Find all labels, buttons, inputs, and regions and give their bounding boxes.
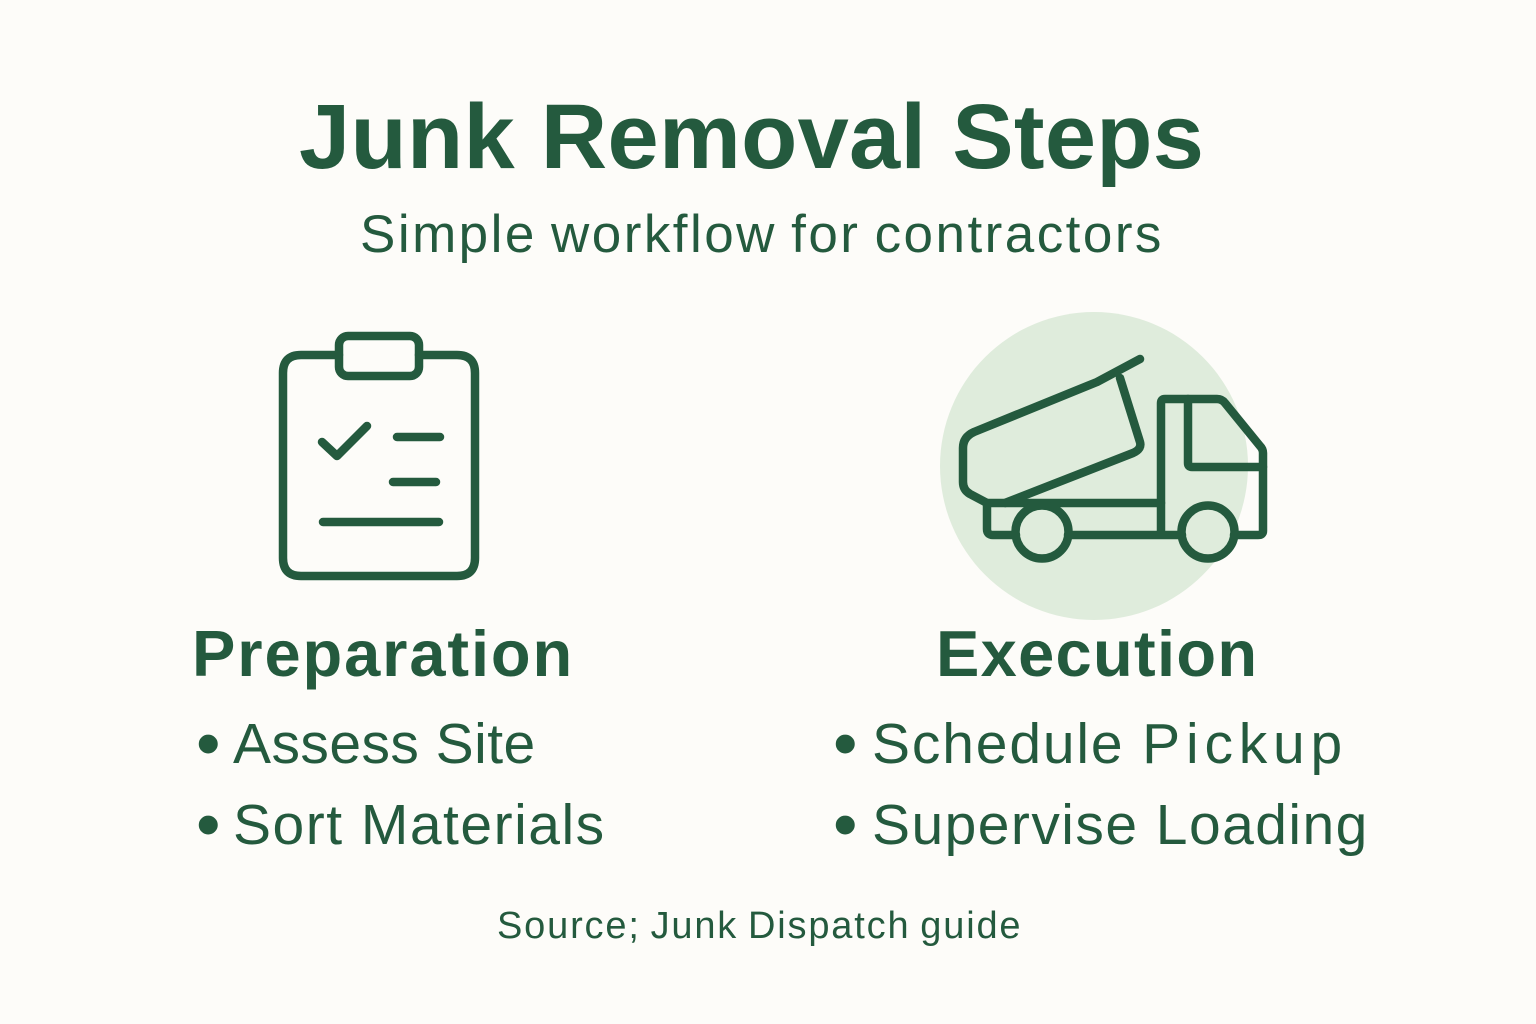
title: Junk Removal Steps [299,86,1204,188]
list: preparation items: Sort Materials [233,793,606,857]
list: execution items: Schedule Pickup [872,712,1348,776]
list: execution items [833,704,1369,863]
icon: clipboard checklist [278,332,480,580]
list: preparation items: • [196,785,221,863]
list: execution items: Supervise Loading [872,793,1369,857]
list: preparation items: • [196,704,221,782]
heading: execution: Execution [936,617,1258,690]
source note: Source; Junk Dispatch guide [497,905,1022,947]
list: preparation items [196,704,606,863]
subtitle: Simple workflow for contractors [360,205,1164,264]
list: execution items: • [833,704,858,782]
list: execution items: • [833,785,858,863]
list: preparation items: Assess Site [233,712,536,776]
truck outline [963,359,1263,558]
heading: preparation: Preparation [192,617,574,690]
icon background circle [940,312,1248,620]
icon: dump truck [940,312,1268,620]
